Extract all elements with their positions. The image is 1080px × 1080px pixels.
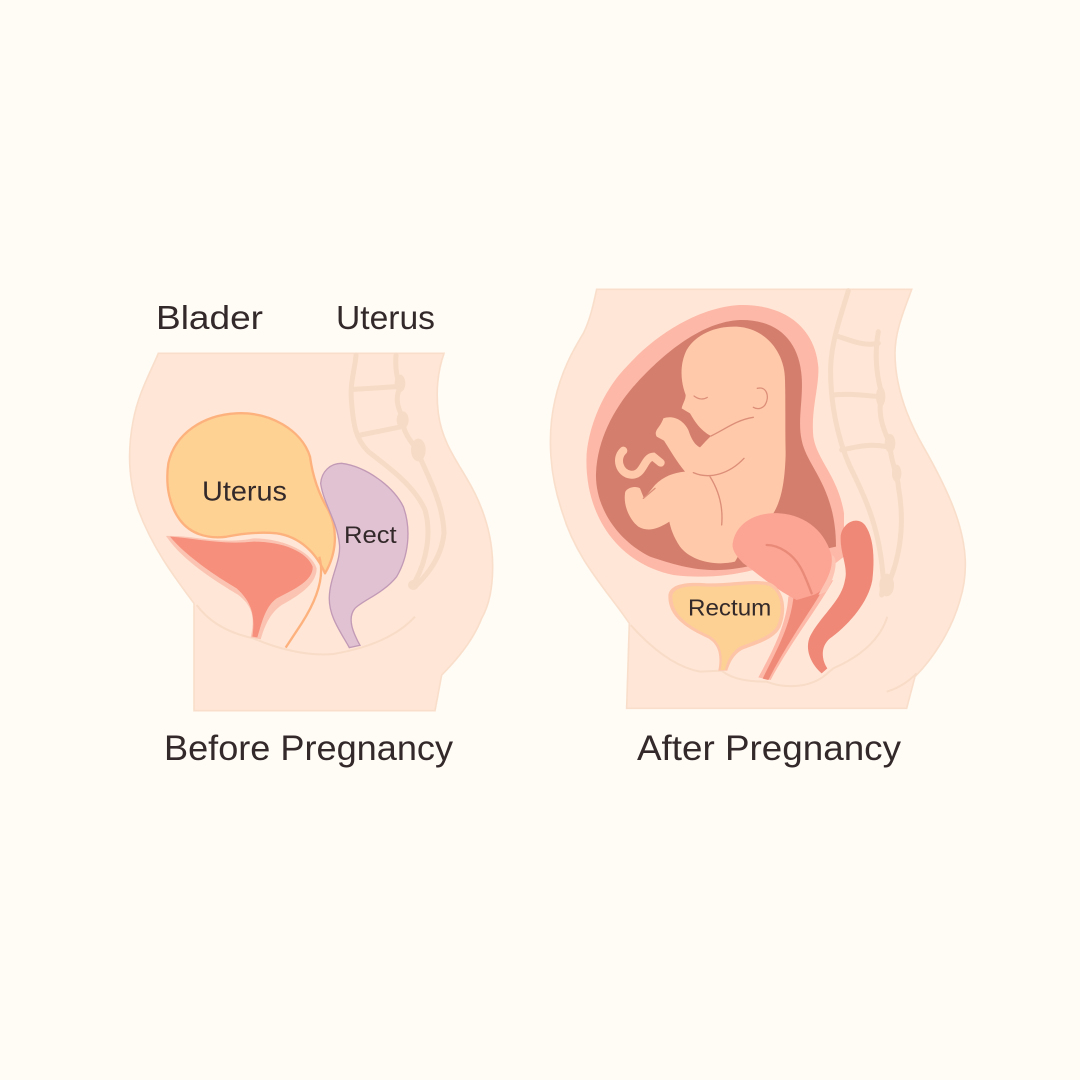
organ: bladder labelled rectum [668,581,784,671]
label: rect inside organ: Rect [344,522,397,549]
organ: rectum red [808,521,874,673]
fetus [625,327,786,563]
spine: before [351,355,444,590]
uterine wall [586,305,844,577]
umbilical cord [619,451,661,475]
organ: uterus yellow [167,413,335,648]
label: blader: Blader [156,299,263,336]
organ: bladder red [166,536,317,639]
body silhouette: after [550,289,965,708]
organ: rectum purple [321,463,408,648]
panel: after pregnancy diagram [550,289,965,708]
spine: after [831,291,901,596]
heading: before pregnancy: Before Pregnancy [164,729,454,768]
label: uterus inside organ: Uterus [202,476,287,507]
label: rectum inside organ: Rectum [688,594,771,620]
pelvic floor line: after [631,617,917,692]
body silhouette: before [130,353,493,711]
heading: after pregnancy: After Pregnancy [637,729,902,768]
amniotic cavity [596,320,836,570]
cervix and vaginal canal [733,513,836,680]
panel: before pregnancy diagram [130,353,493,711]
label: uterus: Uterus [336,299,435,336]
pelvic floor line: before [197,605,415,654]
